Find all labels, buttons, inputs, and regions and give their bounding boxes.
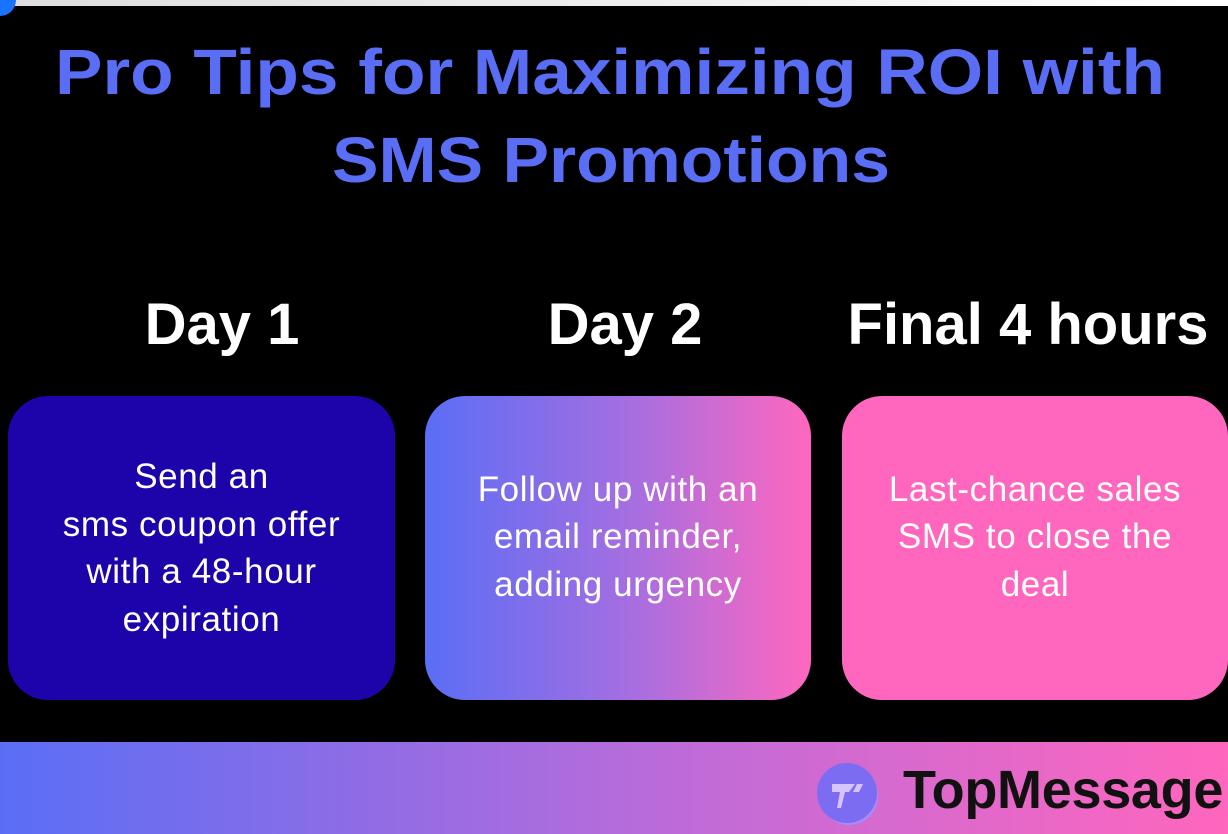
card: Day 2: email reminder, — [494, 517, 742, 556]
card: Day 2 — [425, 396, 811, 700]
card: Day 1: sms coupon offer — [63, 504, 340, 544]
card: Day 1: expiration — [123, 600, 280, 638]
logo text: TopMessage — [903, 760, 1223, 820]
card: Final 4 hours: SMS to close the — [898, 517, 1172, 556]
card: Day 2: adding urgency — [494, 565, 742, 604]
card: Day 1: with a 48-hour — [86, 552, 317, 591]
heading: Final 4 hours: Final 4 hours — [848, 292, 1208, 357]
heading: Day 2: Day 2 — [548, 292, 702, 357]
heading: Day 1: Day 1 — [145, 292, 299, 357]
footer band — [0, 742, 1228, 834]
title: Pro Tips for Maximizing ROI with — [55, 36, 1165, 108]
card: Final 4 hours: Last-chance sales — [889, 470, 1181, 509]
top white strip — [0, 0, 1228, 6]
corner blue dot — [0, 0, 16, 16]
card: Day 1 — [8, 396, 395, 700]
card: Final 4 hours: deal — [1001, 565, 1069, 604]
card: Day 2: Follow up with an — [478, 470, 758, 509]
card: Day 1: Send an — [134, 457, 269, 496]
title — [55, 36, 1165, 196]
title: SMS Promotions — [332, 124, 890, 196]
logo icon — [817, 763, 878, 825]
card: Final 4 hours — [842, 396, 1228, 700]
